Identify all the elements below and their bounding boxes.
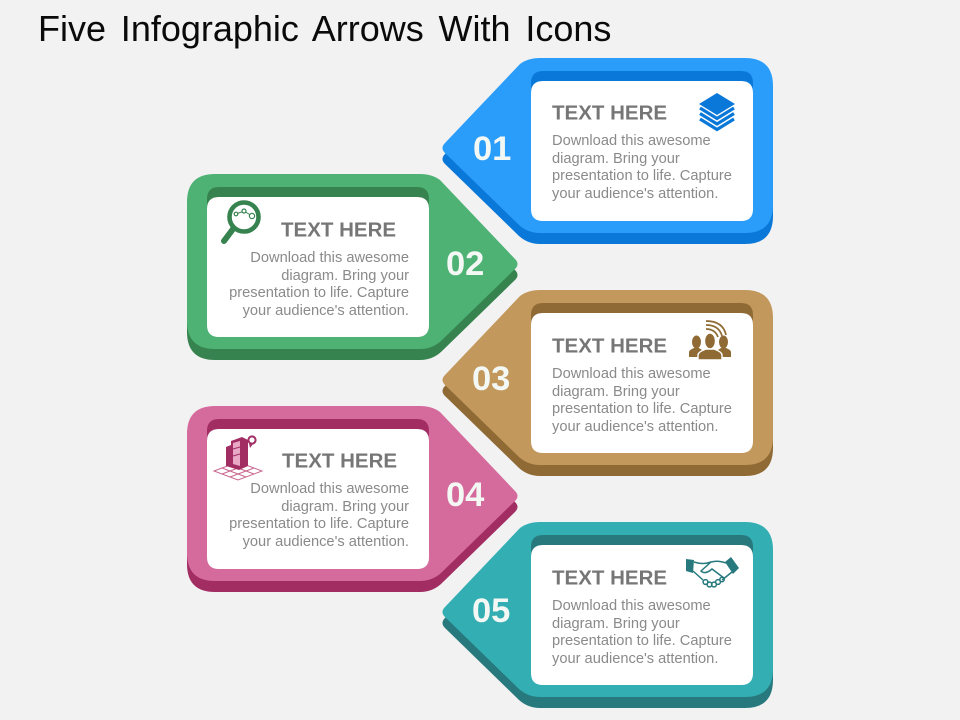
text block 04: diagram. Bring your (281, 499, 409, 515)
number 01: 01 (473, 130, 511, 168)
text block 01: presentation to life. Capture (552, 168, 732, 184)
panel: 05 teal arrow (442, 522, 773, 708)
text block 03: presentation to life. Capture (552, 401, 732, 417)
icon: people with signal (689, 321, 731, 360)
icon: stacked layers (699, 93, 735, 130)
arrow body 03 (442, 290, 773, 476)
text block 03: Download this awesome (552, 366, 711, 382)
text block 01: diagram. Bring your (552, 151, 680, 167)
heading 01: TEXT HERE (552, 102, 667, 124)
heading 05: TEXT HERE (552, 566, 667, 590)
arrow body 01 (442, 58, 773, 244)
text block 05: Download this awesome (552, 598, 711, 614)
title: Five Infographic Arrows With Icons (38, 8, 611, 49)
text block 05: presentation to life. Capture (552, 633, 732, 649)
text block 05: your audience's attention. (552, 651, 718, 667)
arrow body 05 (442, 522, 773, 708)
arrow body 02 (187, 174, 518, 360)
panel: 01 blue arrow (442, 58, 773, 244)
panel: 02 green arrow (187, 174, 518, 360)
heading 02: TEXT HERE (281, 218, 396, 242)
number 03: 03 (472, 360, 510, 398)
icon: building on map with pin (214, 436, 262, 480)
panel: 03 tan arrow (442, 290, 773, 476)
panel: 04 pink arrow (187, 406, 518, 592)
text block 03: your audience's attention. (552, 419, 718, 435)
text block 04: presentation to life. Capture (229, 516, 409, 532)
number 02: 02 (446, 245, 484, 283)
icon: magnifying glass (224, 202, 258, 241)
text block 05: diagram. Bring your (552, 616, 680, 632)
number 05: 05 (472, 592, 510, 630)
text block 01: your audience's attention. (552, 186, 718, 202)
heading 03: TEXT HERE (552, 334, 667, 358)
arrow body 04 (187, 406, 518, 592)
heading 04: TEXT HERE (282, 450, 397, 472)
text block 02: presentation to life. Capture (229, 285, 409, 301)
number 04: 04 (446, 476, 484, 514)
text block 01: Download this awesome (552, 133, 711, 149)
text block 02: Download this awesome (250, 250, 409, 266)
text block 03: diagram. Bring your (552, 384, 680, 400)
text block 02: diagram. Bring your (281, 268, 409, 284)
text block 04: your audience's attention. (243, 534, 409, 550)
text block 04: Download this awesome (250, 481, 409, 497)
text block 02: your audience's attention. (243, 303, 409, 319)
icon: handshake (686, 557, 739, 587)
